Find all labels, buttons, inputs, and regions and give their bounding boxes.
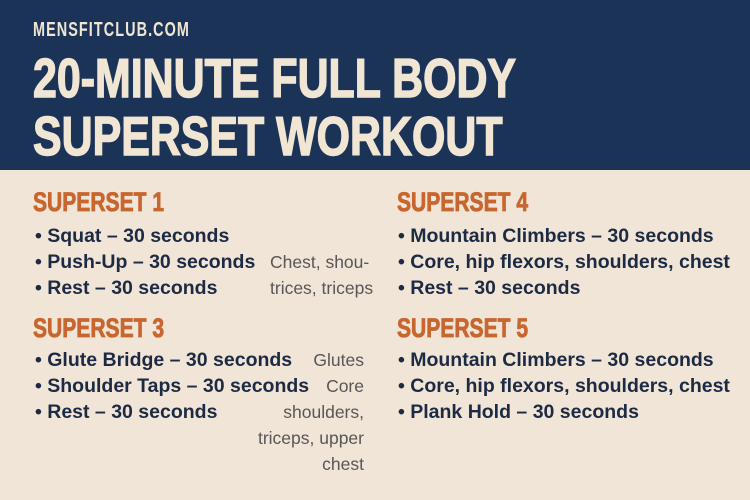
panel: superset 5 xyxy=(397,313,730,423)
muscle note: Chest, shou- xyxy=(270,252,369,272)
exercise list: • Mountain Climbers – 30 seconds xyxy=(398,349,714,371)
exercise list xyxy=(398,349,730,423)
muscle note: shoulders, xyxy=(283,402,364,422)
exercise list: • Plank Hold – 30 seconds xyxy=(398,401,639,423)
exercise list: • Shoulder Taps – 30 seconds xyxy=(35,375,309,397)
exercise list xyxy=(35,349,309,423)
exercise list: • Mountain Climbers – 30 seconds xyxy=(398,225,714,247)
muscle note: triceps, upper xyxy=(258,428,364,448)
exercise list: • Rest – 30 seconds xyxy=(35,401,217,423)
muscle note: chest xyxy=(322,454,364,474)
exercise list: • Glute Bridge – 30 seconds xyxy=(35,349,292,371)
muscle note xyxy=(258,350,364,474)
site name: MENSFITCLUB.COM xyxy=(33,19,190,41)
exercise list: • Squat – 30 seconds xyxy=(35,225,229,247)
heading: SUPERSET 4 xyxy=(397,187,528,217)
exercise list: • Core, hip flexors, shoulders, chest xyxy=(398,375,730,397)
exercise list: • Push-Up – 30 seconds xyxy=(35,251,255,273)
exercise list: • Rest – 30 seconds xyxy=(398,277,580,299)
heading: SUPERSET 1 xyxy=(33,187,164,217)
panel: superset 3 xyxy=(33,313,364,474)
muscle note: trices, triceps xyxy=(270,278,373,298)
header band xyxy=(0,0,750,170)
panel: superset 1 xyxy=(33,187,373,299)
title xyxy=(33,47,516,167)
exercise list xyxy=(35,225,255,299)
exercise list: • Core, hip flexors, shoulders, chest xyxy=(398,251,730,273)
title: 20-MINUTE FULL BODY xyxy=(33,47,516,109)
muscle note: Core xyxy=(326,376,364,396)
panel: superset 4 xyxy=(397,187,730,299)
exercise list: • Rest – 30 seconds xyxy=(35,277,217,299)
exercise list xyxy=(398,225,730,299)
muscle note: Glutes xyxy=(313,350,364,370)
muscle note xyxy=(270,252,373,298)
title: SUPERSET WORKOUT xyxy=(33,105,503,167)
heading: SUPERSET 3 xyxy=(33,313,164,343)
heading: SUPERSET 5 xyxy=(397,313,528,343)
